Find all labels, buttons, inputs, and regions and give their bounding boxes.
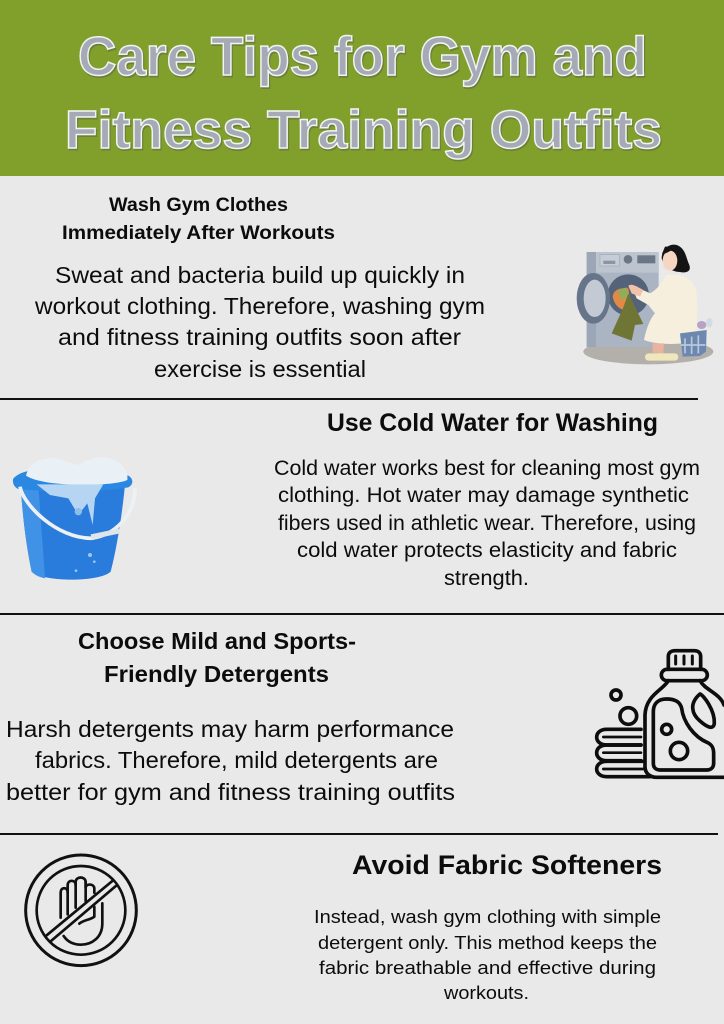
text: avoid softeners: fabric breathable and effective during bbox=[319, 957, 656, 978]
heading: mild detergents: Friendly Detergents bbox=[104, 661, 329, 687]
text: avoid softeners bbox=[314, 906, 661, 1003]
title banner: Care Tips for Gym and bbox=[78, 25, 647, 87]
text: avoid softeners: Instead, wash gym clothing with simple bbox=[314, 906, 661, 927]
heading: mild detergents: Choose Mild and Sports- bbox=[78, 628, 356, 654]
text: wash immediately: and fitness training outfits soon after bbox=[58, 324, 461, 350]
text: cold water: fibers used in athletic wear. Therefore, using bbox=[278, 512, 696, 535]
text: wash immediately: exercise is essential bbox=[154, 356, 366, 382]
heading: mild detergents bbox=[78, 628, 356, 687]
text: mild detergents: fabrics. Therefore, mild detergents are bbox=[35, 747, 438, 773]
divider bbox=[0, 398, 698, 400]
title banner: Care Tips for Gym and bbox=[79, 26, 648, 88]
text: cold water: Cold water works best for cleaning most gym bbox=[274, 457, 700, 480]
text: mild detergents: Harsh detergents may harm performance bbox=[6, 716, 454, 742]
text: cold water: cold water protects elasticity and fabric bbox=[297, 539, 677, 562]
icon: detergent bottle and towels bbox=[597, 651, 724, 777]
text: mild detergents: better for gym and fitness training outfits bbox=[6, 779, 455, 805]
text: wash immediately: Sweat and bacteria build up quickly in bbox=[55, 262, 465, 288]
heading: wash immediately: Wash Gym Clothes bbox=[109, 195, 288, 216]
text: avoid softeners: detergent only. This method keeps the bbox=[318, 932, 657, 953]
text: mild detergents bbox=[6, 716, 455, 805]
title banner bbox=[0, 0, 724, 176]
text: cold water bbox=[274, 457, 700, 590]
text: cold water: strength. bbox=[444, 567, 529, 590]
heading: wash immediately bbox=[62, 195, 335, 244]
text: wash immediately bbox=[34, 262, 485, 382]
icon: no hand bbox=[26, 855, 136, 966]
divider bbox=[0, 613, 724, 615]
heading: avoid softeners: Avoid Fabric Softeners bbox=[352, 850, 662, 880]
heading: cold water: Use Cold Water for Washing bbox=[327, 409, 658, 437]
title banner: Fitness Training Outfits bbox=[65, 100, 662, 160]
title banner: Fitness Training Outfits bbox=[66, 102, 663, 162]
text: wash immediately: workout clothing. Therefore, washing gym bbox=[34, 293, 485, 319]
text: avoid softeners: workouts. bbox=[443, 982, 529, 1003]
divider bbox=[0, 833, 718, 835]
icon: woman at washing machine bbox=[577, 245, 713, 364]
heading: wash immediately: Immediately After Workouts bbox=[62, 223, 335, 244]
icon: bucket with foam bbox=[13, 457, 135, 580]
text: cold water: clothing. Hot water may damage synthetic bbox=[278, 484, 689, 507]
